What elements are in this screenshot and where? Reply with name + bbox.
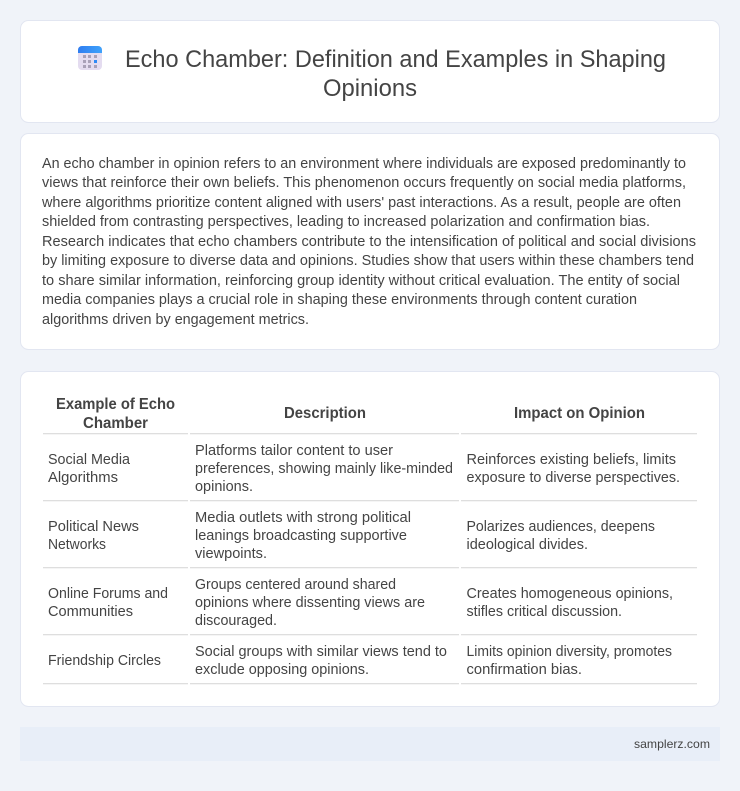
panel: title card: [20, 20, 720, 122]
table row: Social Media Algorithms: Reinforces existing beliefs, limits: [466, 452, 676, 468]
table row: Online Forums and Communities: [43, 577, 697, 635]
panel: examples table: [20, 372, 720, 706]
table row: Friendship Circles: Friendship Circles: [48, 653, 161, 669]
text block: definition: shielded from contrasting perspectives, leading to increased polarization and confirmation bias.: [42, 214, 650, 230]
table row: Friendship Circles: confirmation bias.: [466, 662, 582, 678]
table row: Online Forums and Communities: Communities: [48, 604, 133, 620]
table row: Political News Networks: leanings broadcasting supportive: [195, 528, 407, 544]
table row: Social Media Algorithms: Algorithms: [48, 470, 118, 486]
table row: Online Forums and Communities: stifles critical discussion.: [466, 604, 622, 620]
footer bar: [20, 727, 720, 761]
table row: Social Media Algorithms: preferences, showing mainly like-minded: [195, 461, 453, 477]
table header: Description: [284, 405, 366, 422]
title: Echo Chamber: Definition and Examples in Shaping: [125, 46, 666, 73]
title: [125, 46, 666, 102]
table header: Impact on Opinion: [514, 405, 645, 422]
text block: definition: media companies plays a crucial role in shaping these environments through content curation: [42, 292, 637, 308]
table row: Social Media Algorithms: [43, 443, 697, 501]
table header: [43, 396, 697, 434]
text block: definition: views that reinforce their own beliefs. This phenomenon occurs frequently on social media platforms,: [42, 175, 686, 191]
table row: Social Media Algorithms: exposure to diverse perspectives.: [466, 470, 680, 486]
icon: calendar: [78, 46, 102, 70]
table row: Social Media Algorithms: Social Media: [48, 452, 130, 468]
text block: definition: to share similar information, reinforcing group identity without critical evaluation. The entity of social: [42, 273, 680, 289]
table row: Political News Networks: Media outlets with strong political: [195, 510, 411, 526]
table header: Example of Echo: [56, 396, 175, 413]
table row: Political News Networks: [43, 510, 697, 568]
text block: definition: [41, 156, 696, 328]
table row: Online Forums and Communities: Creates homogeneous opinions,: [466, 586, 673, 602]
table row: Political News Networks: Polarizes audiences, deepens: [466, 519, 655, 535]
text block: definition: algorithms driven by engagement metrics.: [42, 312, 309, 328]
text block: definition: Research indicates that echo chambers contribute to the intensification of political and social divisions: [42, 234, 696, 250]
table row: Political News Networks: ideological divides.: [466, 537, 588, 553]
table row: Friendship Circles: Limits opinion diversity, promotes: [466, 644, 672, 660]
text block: definition: where algorithms prioritize content aligned with users' past interactions. As a result, people are often: [41, 195, 681, 211]
table row: Political News Networks: Political News: [48, 519, 139, 535]
table header: Chamber: [83, 415, 148, 432]
title: Opinions: [323, 75, 417, 102]
table row: Friendship Circles: [43, 644, 697, 684]
table row: Online Forums and Communities: discouraged.: [195, 613, 277, 629]
text block: definition: by limiting exposure to diverse data and opinions. Studies show that users within these chambers tend: [42, 253, 694, 269]
table row: Political News Networks: viewpoints.: [195, 546, 267, 562]
table row: Social Media Algorithms: Platforms tailor content to user: [195, 443, 393, 459]
table row: Online Forums and Communities: Online Forums and: [48, 586, 168, 602]
table row: Political News Networks: Networks: [48, 537, 106, 553]
panel: definition paragraph: [20, 134, 720, 350]
table row: Online Forums and Communities: opinions where dissenting views are: [195, 595, 425, 611]
table row: Friendship Circles: exclude opposing opinions.: [195, 662, 369, 678]
footer text: samplerz.com: [634, 737, 710, 751]
table row: Friendship Circles: Social groups with similar views tend to: [195, 644, 447, 660]
table row: Online Forums and Communities: Groups centered around shared: [195, 577, 396, 593]
table row: Social Media Algorithms: opinions.: [195, 479, 253, 495]
text block: definition: An echo chamber in opinion refers to an environment where individuals are exposed predominantly to: [42, 156, 686, 172]
